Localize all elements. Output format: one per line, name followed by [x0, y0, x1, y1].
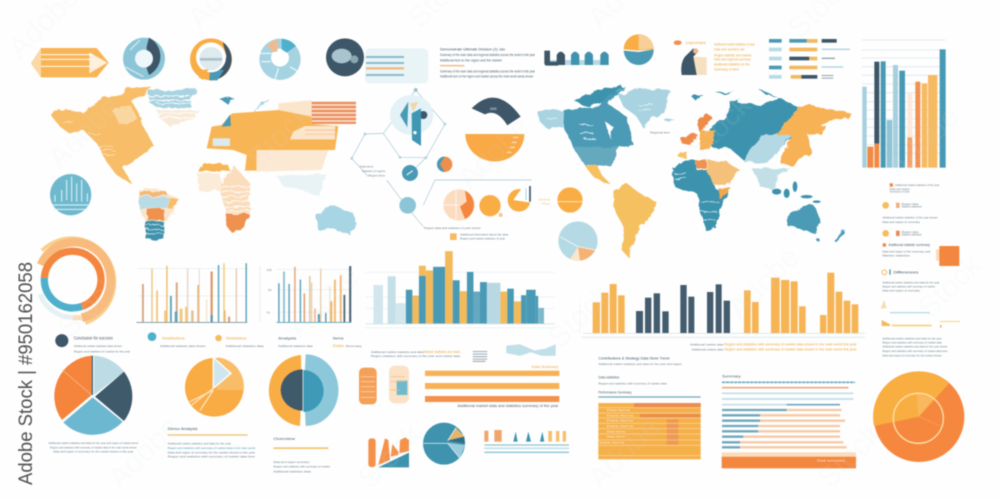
- text block: data analysis: Region and statistics with summary of market data in the main world: [168, 446, 255, 450]
- heading with clock icon: Differences: [893, 270, 918, 275]
- note list: Summary of year: [890, 189, 910, 193]
- orange circle with rule and label: [538, 187, 583, 213]
- navy arc gauge: [472, 98, 521, 125]
- icon: person profile with copy: Additional market statistics of year: [714, 42, 756, 46]
- legend: teal and orange items: Additional statistics data: [278, 344, 313, 348]
- note list: Region data: [902, 230, 919, 234]
- horizontal orange bars: Additional market data and statistics summary of the year: [457, 404, 559, 408]
- note with orange square: Additional information about the data: [460, 232, 509, 236]
- text block: top centre heading and copy: Summary of the main data and regional statistics across the world in this year: [440, 70, 536, 74]
- text block: data analysis: Demo Analysis: [168, 426, 198, 431]
- faint stock watermark: Stock: [242, 98, 319, 175]
- split pie orange over teal: [624, 34, 654, 65]
- map: Greenland and Alaska: [537, 88, 673, 128]
- small label text: [360, 164, 386, 178]
- concentric ring chart: [40, 238, 114, 323]
- note list: Data and region: [890, 187, 910, 191]
- legend: teal and orange items: Additional statistics data shown: [160, 344, 206, 348]
- small label text: Region items: [368, 174, 386, 178]
- faint stock watermark: Adobe: [452, 110, 536, 195]
- faint stock watermark: Adobe: [282, 260, 366, 345]
- note list: [882, 183, 939, 258]
- bar chart: thin bars right: [260, 266, 351, 322]
- text block: top centre heading and copy: Additional text on the region and market across the main world areas shown: [440, 75, 533, 79]
- text block below split circle: Region and statistics with summary of market: [273, 465, 330, 469]
- bar chart: thin bars left: [136, 263, 247, 322]
- text block: Additional market statistics and data for the year shown: [882, 345, 948, 349]
- text block: top centre heading and copy: Summary of the main data and regional statistics across the world in this year: [440, 53, 536, 57]
- legend: navy badge and copy: Region and statistics of market for the year: [74, 349, 130, 353]
- table left: heading and orange rows: Data items: [607, 424, 634, 428]
- table left: heading and orange rows: Data items: [607, 408, 631, 412]
- teal pie with wedges: [423, 423, 465, 465]
- light blue pie with orange wedge: [558, 221, 598, 261]
- legend: navy badge and copy: Conclusion for success: [74, 336, 113, 341]
- map: South-East Asia islands: [772, 181, 821, 203]
- icon: person profile with copy: Data and regional summary: [714, 58, 751, 62]
- note list: Data and region of the summary year: [882, 250, 931, 254]
- legend: teal and orange items: Analysis: [278, 337, 297, 341]
- horizontal orange bars: [425, 365, 559, 408]
- faint stock watermark: Stock: [812, 418, 889, 495]
- map: orange Eurasia: [207, 100, 356, 172]
- panel: middle-left ring and bar charts: [40, 238, 556, 361]
- orange pie with ring: [873, 371, 964, 462]
- bar chart: wide blue and orange bars: [365, 251, 555, 328]
- table right: heading and striped rows: Total summary: [817, 458, 846, 462]
- text block: top centre heading and copy: [440, 47, 536, 79]
- text block below split circle: Additional statistics data: [273, 469, 311, 473]
- map: pale South-East Asia and Australia: [277, 173, 357, 235]
- bar chart: orange and navy columns: [580, 273, 865, 337]
- orange pie with notch: [508, 186, 530, 212]
- faint stock watermark: Stock: [352, 418, 429, 495]
- faint stock watermark: Adobe: [102, 410, 186, 495]
- bar chart: top right: [862, 40, 946, 168]
- note list: Market statistics: [882, 254, 911, 258]
- map label text: Regional item: [650, 130, 671, 134]
- icon: teal city-chart circle: [50, 174, 91, 215]
- caption under wide chart: Market statistics and data: [424, 350, 461, 354]
- note list: Data and region of summary: [882, 220, 921, 224]
- text block: top centre heading and copy: Demonstrate Ultimate Division (2) Jan: [440, 47, 505, 52]
- map: Greenland striped blue: [148, 89, 268, 127]
- table left: heading and orange rows: Performance Summary: [598, 391, 632, 395]
- bar chart: thin bars right: 10: [267, 310, 270, 314]
- icon row: bottles: [544, 51, 609, 66]
- table left: heading and orange rows: [598, 355, 701, 459]
- orange circle with rule and label: Map: [542, 202, 551, 206]
- panel: centre network diagram, arcs and pies: [351, 34, 654, 261]
- map: banded South America: [138, 188, 178, 240]
- pie chart: four segments: [54, 356, 132, 435]
- table left: heading and orange rows: Data items: [607, 413, 634, 417]
- caption under wide chart: [371, 350, 487, 361]
- small mountain chart and rules: [881, 300, 960, 328]
- orange and peach pills: [359, 366, 409, 404]
- map: striped Africa: [197, 163, 250, 232]
- faint stock watermark: Stock: [542, 278, 619, 355]
- faint stock watermark: Adobe: [582, 410, 666, 495]
- note list: Market statistics: [902, 233, 922, 237]
- chart caption: Additional market data: [690, 343, 724, 347]
- pie chart: orange with blue wedge: [185, 357, 244, 417]
- icon: person profile with copy: Region statistic and market: [714, 53, 751, 57]
- heading with clock icon: Region and statistics with summary of market: [882, 285, 935, 289]
- icon: orange arrow banner: [31, 48, 109, 77]
- faint stock watermark: Adobe: [882, 100, 966, 185]
- orange half circle: [465, 134, 524, 161]
- note list: Additional market statistics of the year shown: [882, 215, 938, 219]
- text block below split circle: Overview: [273, 437, 296, 441]
- panel: right column notes and orange pie: [873, 183, 964, 462]
- table right: heading and striped rows: Summary: [722, 374, 741, 378]
- icon: person profile with copy: Additional statistics for the: [714, 63, 750, 67]
- icon: person profile with copy: Data and numbers are: [714, 48, 745, 52]
- caption under wide chart: Additional market statistics and data: [371, 350, 424, 354]
- map: Central and South America: [583, 164, 657, 257]
- icon: person profile with copy: Important: [686, 41, 706, 45]
- caption under wide chart: Region statistics with summary of the year and market data: [371, 354, 460, 358]
- map: Australia and New Zealand: [787, 205, 845, 243]
- donut: light-blue segmented: [259, 38, 301, 80]
- orange square: [936, 246, 959, 266]
- table left: heading and orange rows: Data items: [599, 441, 625, 445]
- chart caption: Region and statistics with summary of market data shown in the main world this year: [724, 347, 858, 351]
- light blue circle: [399, 197, 416, 214]
- donut: blue and navy: [123, 38, 165, 80]
- pie chart caption: Region and statistics with summary of market data in the main world shown: [50, 445, 137, 449]
- small orange-teal pie: [437, 157, 452, 172]
- table left: heading and orange rows: Data items: [607, 435, 626, 439]
- legend: teal and orange items: Statistics: [162, 337, 185, 341]
- text block below split circle: [273, 437, 330, 473]
- bar chart: thin bars right: 50: [268, 288, 272, 292]
- navy arc gauge: 000: [490, 106, 497, 111]
- heading with clock icon: Additional market statistics and data for the year: [882, 280, 939, 284]
- faint stock watermark: Stock: [912, 248, 989, 325]
- table right: heading and striped rows: [722, 374, 856, 468]
- legend: teal and orange items: Data: [333, 344, 345, 348]
- legend: navy badge and copy: Additional market statistics data shown: [74, 344, 122, 348]
- icon: person profile with copy: Summary of item: [714, 68, 739, 72]
- text block: data analysis: Additional market statistics and data for the year: [168, 442, 231, 446]
- pie chart caption: Data and region of summary for the market shown in this year: [53, 449, 133, 453]
- table left: heading and orange rows: Additional market statistics and data for the year and region: [598, 362, 682, 366]
- panel: bottom-centre shapes and bars: [359, 365, 569, 467]
- text block: top centre heading and copy: Additional text on the region and the market: [440, 59, 502, 63]
- text block: [882, 336, 948, 357]
- peach and orange pie: [443, 189, 475, 221]
- text block: Region and statistics with summary of market data here: [882, 349, 948, 353]
- icon: teal crystal with glow: [390, 95, 433, 146]
- network connector lines: [351, 88, 532, 227]
- mini column strip: [484, 430, 569, 452]
- chart caption: [690, 343, 858, 351]
- orange circle with badge: [479, 195, 503, 217]
- icon: person profile with copy: [674, 40, 756, 75]
- orange circle with rule and label: Data: [538, 198, 551, 202]
- donut: orange ring with hub: [190, 38, 232, 80]
- note list: Additional statistic summary: [888, 243, 930, 247]
- legend: teal and orange items: Summary: [345, 344, 362, 348]
- teal icon circle: [402, 165, 418, 181]
- text block: data analysis: Region and statistics with summary of market data here: [168, 454, 256, 458]
- table left: heading and orange rows: Data items: [607, 429, 626, 433]
- note list: Additional market statistics of the year: [895, 183, 939, 187]
- panel: bottom-right column chart and tables: [580, 273, 865, 468]
- note with orange square: [424, 226, 509, 240]
- panel: top-left icons and orange world map: [31, 38, 364, 240]
- table left: heading and orange rows: Data statistics: [598, 376, 620, 380]
- heading with clock icon: [882, 269, 939, 293]
- legend: teal and orange items: [148, 332, 362, 348]
- legend: teal and orange items: Items: [333, 337, 344, 341]
- chart caption: Additional market data: [692, 347, 724, 351]
- note with orange square: Region and market statistics of year: [460, 236, 505, 240]
- text block: data analysis: Data and region of summary for the market shown in this year: [168, 450, 255, 454]
- wavy light-blue strip: [506, 344, 556, 356]
- faint stock watermark: Stock: [682, 88, 759, 165]
- legend: navy badge and copy: [55, 334, 130, 353]
- text block: data analysis: [168, 426, 256, 458]
- note list: Region data: [902, 202, 919, 206]
- map: northern islands: [575, 86, 778, 107]
- horizontal orange bars: Data Summary: [532, 365, 559, 369]
- faint stock watermark: Adobe: [722, 240, 806, 325]
- text block below split circle: Data and region summary: [273, 460, 310, 464]
- text block: Additional market statistics and data for the year: [882, 336, 942, 340]
- text block: Region and statistics with summary of market data: [882, 341, 942, 345]
- table left: heading and orange rows: Data items: [607, 419, 634, 423]
- note with orange square: Region data and statistics of year shown: [424, 226, 481, 230]
- pie chart caption: Additional market statistics and data for the year and region of market items: [48, 441, 139, 445]
- bar chart: thin bars right: 100: [267, 268, 272, 272]
- faint stock watermark: Adobe: [42, 90, 126, 175]
- split circle chart: [269, 354, 338, 426]
- small label text: Data items: [360, 164, 374, 168]
- map: North America teal: [547, 87, 653, 167]
- pie chart caption: [48, 441, 139, 453]
- map: Africa: [673, 160, 740, 232]
- heading with clock icon: Data and region of summary: [882, 289, 921, 293]
- pill rows legend: [769, 39, 850, 79]
- legend: teal and orange items: Statistics: [225, 337, 247, 341]
- icon: navy globe circle: [326, 38, 364, 76]
- chart caption: Region and statistics with summary of market data shown in the main world this year: [724, 343, 858, 347]
- faint stock watermark: Stock: [52, 268, 129, 345]
- text: stock identifier along left edge: Adobe Stock | #950162058: [15, 262, 37, 485]
- panel: teal world map and top-right bars: [537, 39, 946, 257]
- table left: heading and orange rows: Contributions & Strategy Data Store Trend: [598, 355, 669, 360]
- skyline chart: [368, 437, 409, 467]
- legend: teal and orange items: Additional statistics data: [225, 344, 264, 348]
- note list: Market statistics: [902, 205, 922, 209]
- blue text-bar card: [365, 48, 428, 83]
- table left: heading and orange rows: Region and statistics with summary of market data: [598, 381, 667, 385]
- text block: Data and region of summary for the market shown: [882, 353, 942, 357]
- map: Eurasia: [679, 98, 852, 190]
- panel: bottom-left pies: [48, 354, 338, 473]
- map: orange world, North America: [51, 87, 153, 184]
- small label text: Statistics of regions: [362, 169, 386, 173]
